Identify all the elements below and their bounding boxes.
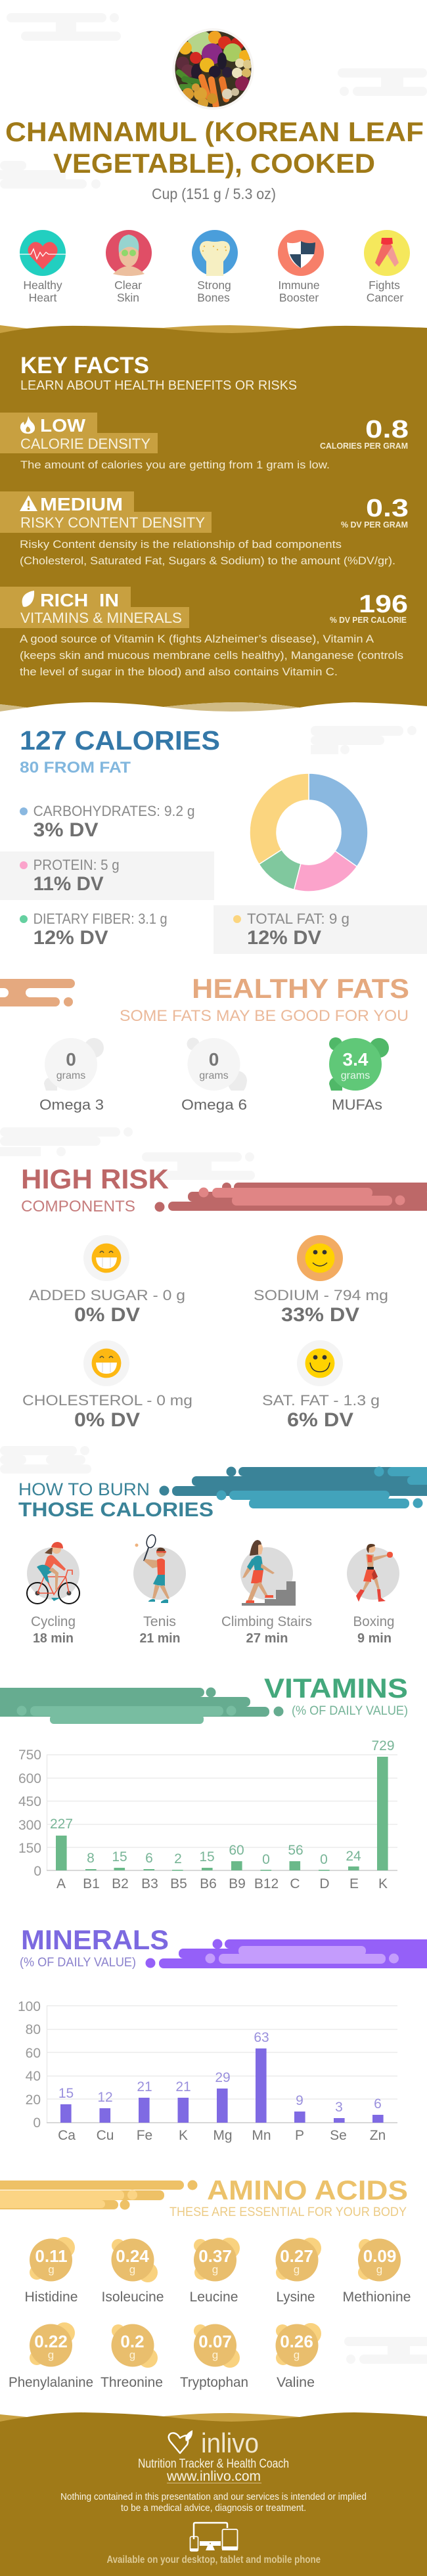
icon: flame xyxy=(20,416,35,434)
amino: lysine: Lysine xyxy=(276,2290,315,2305)
bar chart: minerals: 29 xyxy=(215,2070,231,2085)
benefit labels: Healthy xyxy=(23,279,62,292)
bar chart: minerals: Mg xyxy=(213,2128,233,2143)
bar chart: vitamins: 729 xyxy=(371,1738,395,1753)
decorative cloud top left xyxy=(0,13,427,189)
fact: medium risky content density: (Cholesterol, Saturated Fat, Sugars & Sodium) to the amount (%DV/gr). xyxy=(20,554,395,567)
bar chart: vitamins: 0 xyxy=(320,1852,328,1867)
fact: low calorie density: CALORIE DENSITY xyxy=(20,436,150,452)
fact: low calorie density: The amount of calories you are getting from 1 gram is low. xyxy=(20,459,330,471)
sodium: SODIUM - 794 mg xyxy=(254,1287,388,1303)
legend: total fat xyxy=(233,911,349,949)
bar chart: vitamins: 300 xyxy=(18,1818,41,1833)
panel: healthy fats: SOME FATS MAY BE GOOD FOR YOU xyxy=(120,1007,409,1025)
fact: low calorie density xyxy=(0,413,409,471)
legend: dietary fiber: 12% DV xyxy=(34,927,108,949)
bar chart: minerals: 21 xyxy=(137,2079,152,2094)
bar chart: vitamins xyxy=(18,1738,397,1891)
bar chart: minerals: 20 xyxy=(26,2092,41,2108)
bar chart: vitamins: 6 xyxy=(145,1851,153,1866)
amino: histidine: g xyxy=(48,2263,55,2276)
bar chart: vitamins: B1 xyxy=(83,1876,100,1891)
legend: total fat: TOTAL FAT: 9 g xyxy=(247,911,349,927)
omega 3 xyxy=(39,1038,104,1113)
legend: protein: 11% DV xyxy=(34,873,104,895)
fact: medium risky content density: % DV PER GRAM xyxy=(341,520,408,530)
activity: boxing xyxy=(347,1544,399,1646)
bar chart: vitamins: K xyxy=(378,1876,388,1891)
amino: tryptophan: 0.07 xyxy=(198,2332,232,2351)
serving size: Cup (151 g / 5.3 oz) xyxy=(152,185,276,202)
panel: high risk xyxy=(21,1164,427,1431)
heading: HOW TO BURN xyxy=(18,1480,150,1499)
fact: low calorie density: 0.8 xyxy=(365,416,409,443)
bar chart: minerals: Se xyxy=(330,2128,347,2143)
amino: methionine xyxy=(343,2239,411,2305)
icon: strong bones xyxy=(192,230,238,276)
amino: lysine xyxy=(276,2238,321,2305)
panel: healthy fats xyxy=(0,973,409,1113)
icon: fights cancer xyxy=(364,230,410,276)
bar chart: vitamins: 0 xyxy=(34,1864,41,1879)
bar chart: vitamins: 600 xyxy=(18,1771,41,1786)
fact: rich in vitamins and minerals: 196 xyxy=(359,591,408,618)
legend: protein: PROTEIN: 5 g xyxy=(34,857,120,873)
panel: amino acids: THESE ARE ESSENTIAL FOR YOUR BODY xyxy=(169,2205,407,2219)
amino: phenylalanine: g xyxy=(48,2349,54,2361)
activity: cycling: 18 min xyxy=(33,1631,74,1646)
heading: 127 calories: 127 CALORIES xyxy=(20,725,220,756)
amino: isoleucine: Isoleucine xyxy=(101,2290,164,2305)
bar chart: vitamins: B2 xyxy=(112,1876,129,1891)
activity: boxing: 9 min xyxy=(357,1631,392,1646)
bar chart: minerals: Ca xyxy=(58,2128,76,2143)
fact: medium risky content density: RISKY CONTENT DENSITY xyxy=(20,514,205,531)
gray legend backgrounds xyxy=(0,851,214,900)
sodium: 33% DV xyxy=(281,1304,359,1326)
added sugar: 0% DV xyxy=(74,1304,140,1326)
icon: healthy heart xyxy=(20,230,66,276)
heading: 127 calories xyxy=(20,725,220,777)
logo xyxy=(169,2428,259,2458)
amino: methionine: 0.09 xyxy=(363,2246,396,2266)
amino: histidine xyxy=(25,2237,78,2305)
disclaimer xyxy=(60,2491,367,2514)
title: CHAMNAMUL (KOREAN LEAF xyxy=(5,116,424,147)
bar chart: minerals: 40 xyxy=(26,2069,41,2084)
amino: phenylalanine: Phenylalanine xyxy=(9,2375,93,2390)
benefit icons row xyxy=(20,230,410,276)
heading: HEALTHY FATS xyxy=(192,973,409,1004)
panel: minerals: (% OF DAILY VALUE) xyxy=(20,1956,136,1970)
icon: immune booster xyxy=(278,230,324,276)
amino: tryptophan: Tryptophan xyxy=(180,2375,248,2390)
amino: threonine: g xyxy=(129,2349,135,2361)
heading: MINERALS xyxy=(21,1924,169,1955)
panel: vitamins xyxy=(0,1673,408,1891)
omega 3: grams xyxy=(56,1070,85,1081)
decorative cloud near calories xyxy=(311,726,416,754)
cholesterol: 0% DV xyxy=(74,1409,140,1431)
header graphic xyxy=(0,979,75,1006)
legend: carbohydrates xyxy=(20,803,195,841)
amino: valine: 0.26 xyxy=(280,2332,313,2351)
bar chart: minerals: 63 xyxy=(254,2030,269,2045)
bar chart: vitamins: 15 xyxy=(112,1849,127,1864)
bar chart: minerals: Fe xyxy=(137,2128,152,2143)
panel: how to burn xyxy=(18,1466,427,1646)
decorative cloud xyxy=(0,1446,91,1474)
bar chart: vitamins: B3 xyxy=(141,1876,158,1891)
legend: dietary fiber: DIETARY FIBER: 3.1 g xyxy=(34,911,168,927)
food photo: vegetables xyxy=(171,26,256,112)
header graphic xyxy=(159,1466,427,1508)
panel: vitamins: (% OF DAILY VALUE) xyxy=(292,1704,408,1718)
panel: footer xyxy=(0,2412,427,2576)
benefit labels: Cancer xyxy=(367,291,403,304)
header graphic xyxy=(0,1687,284,1724)
icon: devices xyxy=(190,2523,238,2551)
amino: valine xyxy=(276,2323,321,2390)
activity: climbing stairs xyxy=(221,1540,312,1646)
amino: tryptophan xyxy=(180,2324,248,2390)
availability note: Available on your desktop, tablet and mobile phone xyxy=(106,2554,321,2565)
sodium xyxy=(254,1235,388,1326)
legend: protein xyxy=(20,857,120,895)
fact: rich in vitamins and minerals: VITAMINS & MINERALS xyxy=(20,610,182,626)
saturated fat: 6% DV xyxy=(287,1409,353,1431)
header graphic xyxy=(146,1939,427,1968)
panel: how to burn: THOSE CALORIES xyxy=(18,1498,214,1521)
saturated fat xyxy=(262,1340,380,1431)
bar chart: minerals: 60 xyxy=(26,2046,41,2061)
icon: heart with leaf xyxy=(169,2430,192,2453)
title: VEGETABLE), COOKED xyxy=(53,148,375,179)
added sugar xyxy=(29,1235,185,1326)
activity: climbing stairs: 27 min xyxy=(246,1631,288,1646)
bar chart: vitamins: 24 xyxy=(346,1849,361,1864)
amino: valine: g xyxy=(294,2349,300,2361)
omega 6: 0 xyxy=(209,1049,219,1070)
amino: leucine: g xyxy=(212,2263,218,2276)
bar chart: vitamins: C xyxy=(290,1876,300,1891)
bar chart: vitamins: B5 xyxy=(170,1876,187,1891)
panel: minerals xyxy=(18,1924,427,2143)
panel: key facts xyxy=(0,325,427,712)
bar chart: minerals: 6 xyxy=(374,2096,382,2112)
bar chart: vitamins: D xyxy=(319,1876,330,1891)
mufas xyxy=(329,1037,389,1113)
bar chart: vitamins: B6 xyxy=(200,1876,217,1891)
heading: VITAMINS xyxy=(264,1673,408,1704)
amino: threonine: Threonine xyxy=(101,2375,163,2390)
benefit labels: Strong xyxy=(197,279,231,292)
bar chart: vitamins: 227 xyxy=(50,1817,73,1832)
heading: key facts: LEARN ABOUT HEALTH BENEFITS OR RISKS xyxy=(20,378,297,393)
bar chart: vitamins: 56 xyxy=(288,1843,303,1858)
bar chart: minerals: 21 xyxy=(175,2079,191,2094)
amino: isoleucine: 0.24 xyxy=(116,2246,149,2266)
fact: low calorie density: LOW xyxy=(40,415,86,436)
bar chart: minerals: 9 xyxy=(296,2093,303,2108)
mufas: MUFAs xyxy=(332,1096,382,1113)
bar chart: vitamins: 15 xyxy=(199,1849,215,1864)
activity: boxing: Boxing xyxy=(353,1614,394,1629)
bar chart: vitamins: B12 xyxy=(254,1876,279,1891)
amino: leucine xyxy=(189,2238,240,2305)
amino: valine: Valine xyxy=(277,2375,315,2390)
omega 6: Omega 6 xyxy=(181,1096,247,1113)
website: www.inlivo.com xyxy=(166,2469,261,2484)
amino: histidine: Histidine xyxy=(25,2290,78,2305)
omega 6 xyxy=(181,1038,247,1113)
activity: cycling xyxy=(27,1542,79,1646)
icon: clear skin xyxy=(106,230,152,276)
amino: lysine: 0.27 xyxy=(280,2246,313,2266)
donut chart xyxy=(250,773,368,892)
added sugar: ADDED SUGAR - 0 g xyxy=(29,1287,185,1303)
amino: threonine: 0.2 xyxy=(120,2332,145,2351)
amino: histidine: 0.11 xyxy=(35,2246,68,2266)
bar chart: minerals: 0 xyxy=(33,2115,41,2131)
activity: tennis xyxy=(133,1534,186,1646)
header graphic xyxy=(0,2180,197,2210)
bar chart: minerals: K xyxy=(179,2128,188,2143)
benefit labels: Booster xyxy=(279,291,319,304)
amino: lysine: g xyxy=(294,2263,300,2276)
legend: dietary fiber xyxy=(20,911,168,949)
fact: rich in vitamins and minerals: A good source of Vitamin K (fights Alzheimer’s disease), Vitamin A xyxy=(20,633,374,645)
logo: inlivo xyxy=(201,2428,259,2458)
panel: high risk: COMPONENTS xyxy=(21,1198,135,1215)
benefit labels: Heart xyxy=(29,291,57,304)
cholesterol: CHOLESTEROL - 0 mg xyxy=(22,1392,192,1409)
bar chart: minerals: 3 xyxy=(335,2100,343,2115)
bar chart: vitamins: 2 xyxy=(174,1851,182,1866)
activity: tennis: 21 min xyxy=(139,1631,180,1646)
amino: isoleucine: g xyxy=(129,2263,135,2276)
fact: rich in vitamins and minerals xyxy=(0,587,408,678)
amino: methionine: g xyxy=(376,2263,382,2276)
icon: warning triangle xyxy=(20,495,37,511)
benefit labels: Bones xyxy=(197,291,230,304)
title xyxy=(5,116,424,179)
decorative clouds mid xyxy=(0,1127,255,1180)
heading: 127 calories: 80 FROM FAT xyxy=(20,759,131,777)
bar chart: minerals: Mn xyxy=(252,2128,271,2143)
bar chart: vitamins: 8 xyxy=(87,1851,95,1866)
fact: rich in vitamins and minerals: RICH IN xyxy=(40,590,119,610)
amino: isoleucine xyxy=(101,2239,164,2305)
heading: key facts: KEY FACTS xyxy=(20,353,149,378)
fact: rich in vitamins and minerals: (keeps skin and mucous membrane cells healthy), Manganese (controls xyxy=(20,649,403,662)
bar chart: minerals: 100 xyxy=(18,1999,41,2014)
bar chart: vitamins: B9 xyxy=(229,1876,246,1891)
bar chart: vitamins: E xyxy=(349,1876,359,1891)
omega 3: Omega 3 xyxy=(39,1096,104,1113)
heading: HIGH RISK xyxy=(21,1164,169,1194)
mufas: 3.4 xyxy=(343,1049,369,1070)
icon: leaf xyxy=(22,591,34,607)
amino: leucine: 0.37 xyxy=(198,2246,232,2266)
benefit labels: Fights xyxy=(369,279,400,292)
panel: amino acids xyxy=(0,2175,427,2390)
bar chart: minerals: 15 xyxy=(58,2086,74,2101)
bar chart: minerals: 80 xyxy=(26,2022,41,2037)
benefit labels: Clear xyxy=(114,279,142,292)
bar chart: vitamins: 150 xyxy=(18,1841,41,1856)
omega 3: 0 xyxy=(66,1049,76,1070)
legend: carbohydrates: CARBOHYDRATES: 9.2 g xyxy=(34,803,195,819)
fact: low calorie density: CALORIES PER GRAM xyxy=(320,441,408,451)
fact: medium risky content density: 0.3 xyxy=(366,495,409,522)
bar chart: minerals: 12 xyxy=(97,2090,113,2105)
legend: total fat: 12% DV xyxy=(247,927,321,949)
heading: key facts xyxy=(20,353,297,393)
fact: medium risky content density: Risky Content density is the relationship of bad components xyxy=(20,538,342,551)
activity: tennis: Tenis xyxy=(143,1614,176,1629)
fact: rich in vitamins and minerals: the level of sugar in the blood) and also contains Vitamin C. xyxy=(20,666,338,678)
amino: phenylalanine xyxy=(9,2322,93,2390)
benefit labels xyxy=(23,279,403,304)
legend: carbohydrates: 3% DV xyxy=(34,819,99,841)
header graphic xyxy=(155,1183,427,1211)
tagline: Nutrition Tracker & Health Coach xyxy=(138,2457,289,2471)
bar chart: minerals: Cu xyxy=(97,2128,114,2143)
amino: leucine: Leucine xyxy=(189,2290,238,2305)
cholesterol xyxy=(22,1340,192,1431)
fact: medium risky content density: MEDIUM xyxy=(40,494,123,514)
activity: climbing stairs: Climbing Stairs xyxy=(221,1614,312,1629)
mufas: grams xyxy=(341,1070,370,1081)
fact: rich in vitamins and minerals: % DV PER CALORIE xyxy=(330,615,407,625)
benefit labels: Skin xyxy=(117,291,139,304)
bar chart: vitamins: 450 xyxy=(18,1794,41,1809)
bar chart: vitamins: 60 xyxy=(229,1843,244,1858)
amino: methionine: Methionine xyxy=(343,2290,411,2305)
heading: AMINO ACIDS xyxy=(207,2175,408,2205)
bar chart: vitamins: 0 xyxy=(262,1852,270,1867)
panel: calories xyxy=(0,725,427,954)
omega 6: grams xyxy=(199,1070,229,1081)
decorative cloud xyxy=(344,2337,427,2364)
bar chart: minerals: Zn xyxy=(370,2128,386,2143)
fact: medium risky content density xyxy=(0,491,409,567)
amino: threonine xyxy=(101,2324,163,2390)
bar chart: minerals xyxy=(18,1999,397,2143)
amino: tryptophan: g xyxy=(212,2349,218,2361)
amino: phenylalanine: 0.22 xyxy=(34,2332,68,2351)
benefit labels: Immune xyxy=(278,279,320,292)
disclaimer: Nothing contained in this presentation and our services is intended or implied xyxy=(60,2491,367,2502)
bar chart: minerals: P xyxy=(295,2128,304,2143)
bar chart: vitamins: 750 xyxy=(18,1748,41,1763)
activity: cycling: Cycling xyxy=(31,1614,76,1629)
bar chart: vitamins: A xyxy=(56,1876,66,1891)
disclaimer: to be a medical advice, diagnosis or treatment. xyxy=(121,2502,306,2514)
saturated fat: SAT. FAT - 1.3 g xyxy=(262,1392,380,1409)
